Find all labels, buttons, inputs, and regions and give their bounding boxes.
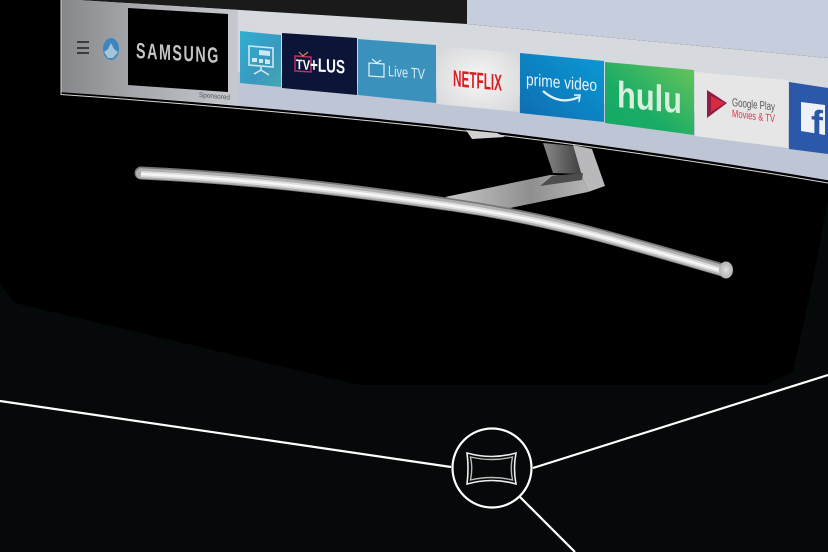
tv screen dark area	[78, 0, 467, 26]
tile: facebook: f	[811, 102, 824, 144]
tile: google play movies and tv	[695, 72, 788, 148]
tile: tv plus	[282, 33, 357, 95]
stand base bar	[141, 173, 726, 272]
tile: netflix	[437, 46, 519, 112]
icon: curved screen in circle	[452, 428, 532, 508]
tv screen light area	[467, 0, 828, 58]
tile: live tv	[358, 39, 436, 103]
tile: netflix: NETFLIX	[453, 65, 502, 96]
tile: prime video: prime video	[526, 70, 597, 95]
tile: hulu	[605, 62, 694, 135]
stand	[445, 143, 605, 208]
tile: facebook	[789, 82, 828, 154]
tile: google play movies and tv: Google Play	[732, 97, 775, 114]
panel: smart hub bar	[61, 0, 828, 183]
stand bar end cap	[719, 262, 733, 278]
power button	[466, 130, 505, 139]
tile: tv plus: +LUS	[310, 55, 345, 78]
tile: live tv: Live TV	[388, 63, 425, 83]
tile: samsung ad: Sponsored	[199, 92, 230, 102]
tile: tv plus: TV	[296, 56, 311, 73]
tile: samsung ad: SAMSUNG	[136, 38, 220, 68]
tile: home screen	[240, 31, 281, 87]
connector lines	[0, 375, 828, 552]
icon: account	[103, 38, 119, 60]
tile: hulu: hulu	[617, 73, 682, 121]
tile: google play movies and tv: Movies & TV	[732, 108, 775, 125]
tile: samsung ad	[128, 8, 230, 102]
icon: hamburger menu	[77, 41, 89, 54]
tile: prime video	[520, 53, 604, 122]
